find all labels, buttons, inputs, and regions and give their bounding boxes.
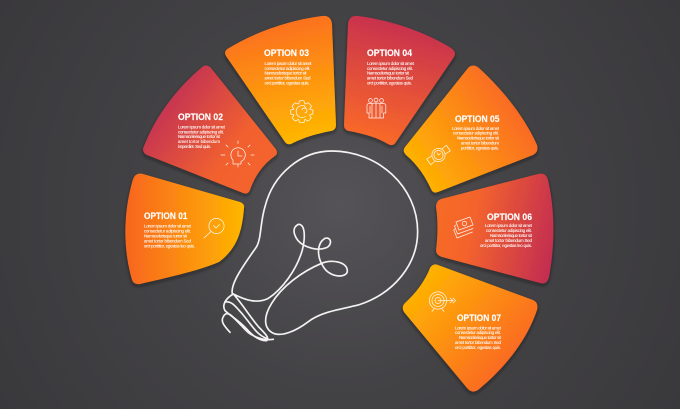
text block: option 04: orci porttitor, egestas quis. [367, 80, 412, 85]
panel: option 03 [225, 16, 336, 144]
text block: option 05: amet tortor bibendum [461, 140, 499, 145]
text block: option 07: amet tortor bibendum Sed [455, 340, 502, 345]
text block: option 03: orci porttitor, egestas quis. [264, 80, 310, 85]
text block: option 04: Lorem ipsum dolor sit amet [367, 61, 415, 66]
text block: option 07: Lorem ipsum dolor sit amet [455, 326, 502, 331]
text block: option 03: amet tortor bibendum Sed [264, 76, 311, 80]
text block: option 01: Namscelerisque tortor sit [144, 234, 188, 238]
text block: option 02 [178, 124, 226, 149]
text block: option 04: amet tortor bibendum Sed [367, 76, 414, 80]
heading: option 04: OPTION 04 [367, 48, 413, 59]
panel: option 02 [143, 66, 277, 194]
text block: option 02: consectetur adipiscing elit. [178, 129, 224, 134]
text block: option 01: orci porttitor, egestas leo quis. [144, 244, 195, 248]
text block: option 03: Lorem ipsum dolor sit amet [264, 61, 312, 66]
text block: option 03 [264, 61, 312, 85]
heading: option 03: OPTION 03 [264, 48, 309, 59]
heading: option 05: OPTION 05 [455, 114, 500, 125]
text block: option 02: Namscelerisque tortor sit [178, 134, 221, 139]
icon: gear [291, 100, 313, 123]
icon: people [367, 98, 386, 118]
panel: option 01 [125, 174, 244, 284]
text block: option 07: orci porttitor, egestas quis. [455, 345, 501, 350]
icon: target [429, 292, 456, 312]
icon: magnifier with check [204, 218, 224, 238]
text block: option 03: consectetur adipiscing elit. [264, 66, 310, 71]
text block: option 05: porttitor, egestas quis. [461, 145, 499, 150]
text block: option 04: consectetur adipiscing elit. [367, 66, 413, 71]
panel: option 04 [344, 16, 455, 145]
panel: option 07 [403, 264, 538, 392]
text block: option 06 [480, 223, 533, 248]
text block: option 02: Lorem ipsum dolor sit amet [178, 124, 226, 130]
heading: option 06: OPTION 06 [487, 212, 532, 223]
text block: option 06: Namscelerisque tortor sit [490, 233, 533, 238]
text block: option 04: Namscelerisque tortor sit [367, 71, 410, 76]
text block: option 02: imperdiet. Sed quis. [178, 144, 211, 149]
text block: option 01 [144, 224, 195, 248]
text block: option 06: amet tortor bibendum Sed [485, 238, 533, 243]
text block: option 07: consectetur adipiscing elit. [455, 330, 501, 335]
text block: option 06: orci porttitor, egestas leo quis. [480, 243, 532, 248]
text block: option 05: Namscelerisque tortor sit [457, 135, 500, 140]
panel: option 05 [404, 66, 538, 193]
text block: option 01: Lorem ipsum dolor sit amet [144, 224, 192, 228]
text block: option 05: Lorem ipsum dolor sit amet [452, 126, 500, 131]
lightbulb line drawing [222, 151, 418, 341]
text block: option 02: amet tortor bibendum [178, 139, 220, 144]
text block: option 07: Namscelerisque tortor sit [459, 335, 502, 340]
heading: option 07: OPTION 07 [457, 313, 501, 324]
icon: banknotes [454, 217, 473, 238]
text block: option 07 [455, 326, 502, 350]
icon: wristwatch [425, 143, 452, 167]
text block: option 05 [452, 126, 500, 150]
text block: option 04 [367, 61, 415, 85]
text block: option 06: Lorem ipsum dolor sit amet [485, 223, 533, 228]
text block: option 01: consectetur adipiscing elit. [144, 228, 191, 234]
heading: option 02: OPTION 02 [178, 112, 223, 123]
text block: option 01: amet tortor bibendum Sed [144, 238, 192, 244]
text block: option 06: consectetur adipiscing elit. [486, 228, 532, 233]
icon: lightbulb with clock [221, 141, 254, 167]
panel: option 06 [436, 174, 553, 283]
text block: option 05: consectetur adipiscing elit. [453, 131, 499, 136]
heading: option 01: OPTION 01 [144, 211, 188, 222]
text block: option 03: Namscelerisque tortor sit [264, 71, 307, 76]
